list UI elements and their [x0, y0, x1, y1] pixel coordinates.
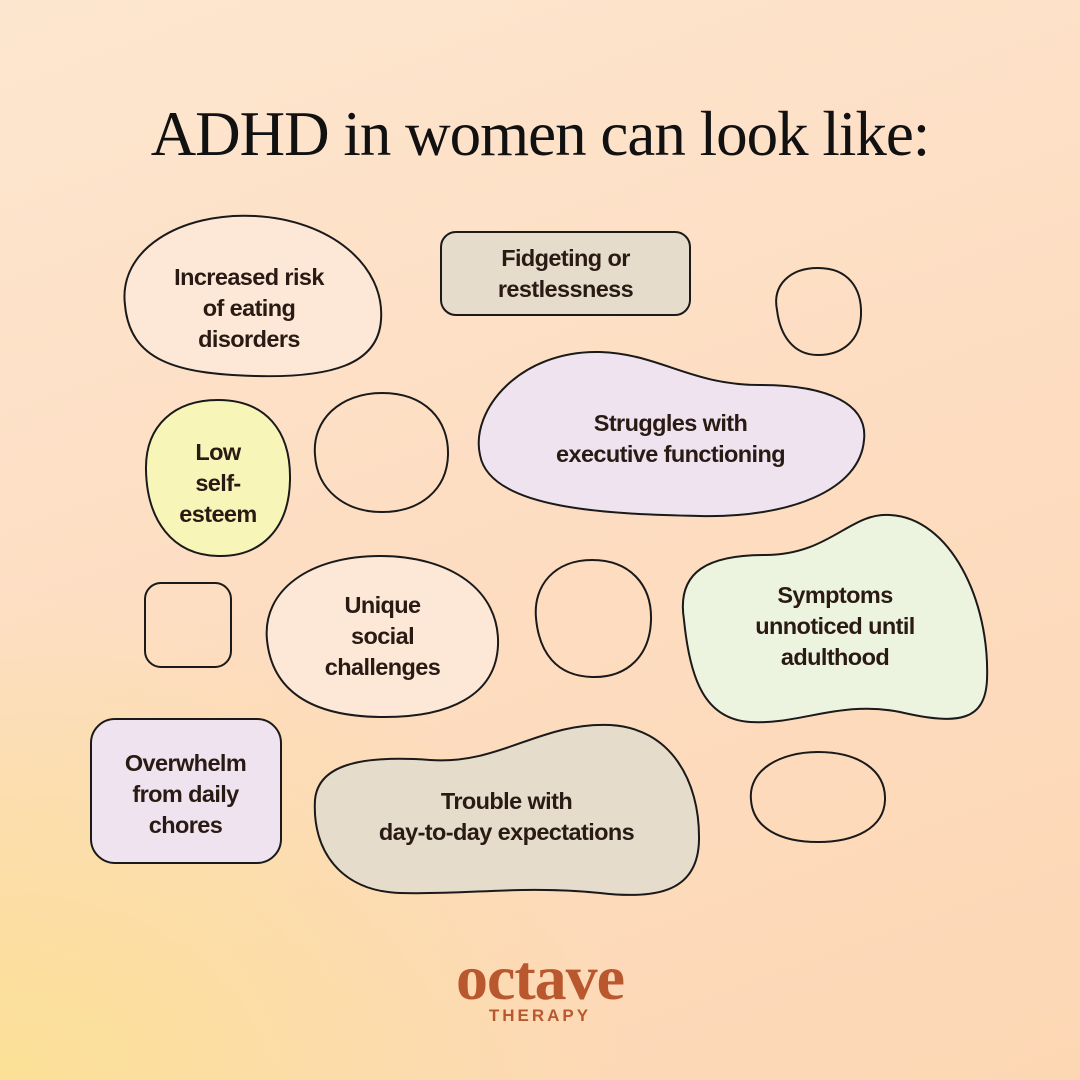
shape: self-esteem blob: [146, 400, 290, 556]
shape: circle middle: [315, 393, 448, 512]
text: eating disorders: Increased risk: [174, 264, 324, 290]
text: adulthood: [755, 582, 915, 670]
text: executive functioning: [556, 410, 785, 467]
text: overwhelm: [125, 750, 246, 838]
text: social challenges: challenges: [325, 654, 440, 680]
shape: social challenges blob: [267, 556, 498, 717]
text: adulthood: unnoticed until: [755, 613, 915, 639]
text: eating disorders: disorders: [198, 326, 300, 352]
text: self-esteem: esteem: [179, 501, 257, 527]
shape: circle top right: [776, 268, 861, 355]
logo: octave: [456, 942, 624, 1013]
shape: executive functioning blob: [479, 352, 864, 516]
text: social challenges: [325, 592, 440, 680]
text: eating disorders: of eating: [203, 295, 295, 321]
text: expectations: day-to-day expectations: [379, 819, 634, 845]
text: self-esteem: self-: [195, 470, 241, 496]
text: adulthood: Symptoms: [777, 582, 893, 608]
shape: circle middle right: [536, 560, 651, 677]
text: fidgeting: Fidgeting or: [501, 245, 630, 271]
shape: overwhelm rect: [91, 719, 281, 863]
title: ADHD in women can look like:: [151, 99, 929, 169]
text: overwhelm: Overwhelm: [125, 750, 246, 776]
shape: fidgeting rect: [441, 232, 690, 315]
shape: expectations blob: [315, 725, 699, 895]
text: executive functioning: executive functioning: [556, 441, 785, 467]
text: expectations: [379, 788, 634, 845]
shape: small rounded square: [145, 583, 231, 667]
text: self-esteem: [179, 439, 257, 527]
text: social challenges: social: [351, 623, 414, 649]
text: expectations: Trouble with: [441, 788, 572, 814]
text: self-esteem: Low: [195, 439, 241, 465]
text: fidgeting: restlessness: [498, 276, 633, 302]
text: fidgeting: [498, 245, 633, 302]
text: overwhelm: chores: [149, 812, 222, 838]
text: executive functioning: Struggles with: [594, 410, 747, 436]
shape: adulthood blob: [683, 515, 987, 722]
shape: eating disorders blob: [124, 216, 381, 376]
logo: THERAPY: [489, 1006, 591, 1025]
text: overwhelm: from daily: [132, 781, 239, 807]
shape: ellipse bottom right: [751, 752, 885, 842]
text: adulthood: adulthood: [781, 644, 889, 670]
text: eating disorders: [174, 264, 324, 352]
text: social challenges: Unique: [344, 592, 421, 618]
